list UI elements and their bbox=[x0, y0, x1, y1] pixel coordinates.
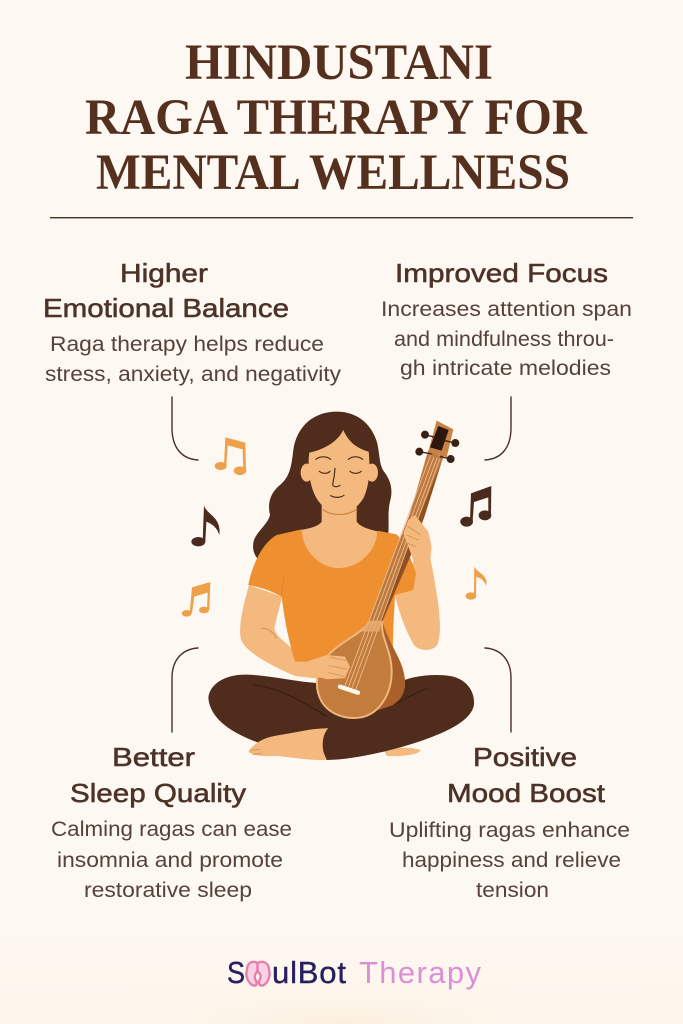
right arm bbox=[395, 550, 440, 650]
music notes bbox=[182, 437, 491, 617]
text: sleep quality description: insomnia and promote bbox=[57, 849, 283, 872]
icon: brain bbox=[246, 962, 270, 986]
logo: SoulBot Therapy: ulBot bbox=[272, 955, 346, 990]
right foot bbox=[383, 748, 421, 756]
heading: mood boost bbox=[447, 742, 606, 808]
note: dark double right bbox=[460, 486, 491, 527]
sitar bbox=[317, 421, 459, 718]
text: mood boost description: tension bbox=[476, 879, 549, 902]
heading: sleep quality bbox=[70, 742, 246, 808]
text: mood boost description bbox=[389, 819, 630, 902]
illustration: woman playing sitar bbox=[208, 412, 474, 760]
connector: bottom left bbox=[172, 648, 198, 732]
text: mood boost description: happiness and relieve bbox=[402, 849, 621, 872]
strings bbox=[345, 455, 440, 690]
title bbox=[85, 35, 588, 201]
neck and chest bbox=[301, 500, 377, 568]
heading: sleep quality: Sleep Quality bbox=[70, 778, 246, 808]
sitar body bbox=[317, 622, 392, 718]
sitar neck bbox=[375, 430, 452, 622]
face bbox=[309, 430, 369, 513]
connector: bottom right bbox=[485, 648, 511, 732]
note: dark single left bbox=[191, 505, 220, 546]
text: sleep quality description bbox=[51, 818, 292, 902]
heading: emotional balance: Higher bbox=[120, 258, 208, 288]
note: orange beamed lower left bbox=[182, 582, 210, 617]
left foot bbox=[248, 728, 328, 760]
text: improved focus description: Increases attention span bbox=[381, 298, 632, 321]
neck joint bbox=[362, 621, 382, 632]
panel: improved focus bbox=[381, 258, 632, 380]
panel: mood boost bbox=[389, 742, 630, 902]
logo: SoulBot Therapy: Therapy bbox=[359, 955, 482, 990]
text: improved focus description: and mindfulness throu- bbox=[394, 328, 614, 351]
text: improved focus description: gh intricate melodies bbox=[400, 357, 611, 380]
right hand bbox=[403, 515, 432, 563]
heading: sleep quality: Better bbox=[112, 742, 195, 772]
text: emotional balance description: stress, anxiety, and negativity bbox=[45, 363, 342, 386]
connector: top left bbox=[172, 397, 198, 460]
legs bbox=[208, 675, 474, 760]
peg box bbox=[428, 421, 453, 457]
heading: mood boost: Mood Boost bbox=[447, 778, 606, 808]
sitar back bbox=[347, 620, 405, 718]
left hand bbox=[307, 655, 350, 679]
panel: emotional balance bbox=[43, 258, 342, 386]
text: sleep quality description: Calming ragas can ease bbox=[51, 818, 292, 841]
connector: top right bbox=[485, 397, 511, 460]
heading: emotional balance bbox=[43, 258, 289, 323]
ears bbox=[301, 464, 313, 482]
left arm bbox=[240, 585, 348, 680]
title: MENTAL WELLNESS bbox=[96, 145, 570, 201]
logo: SoulBot Therapy: S bbox=[227, 955, 245, 990]
heading: emotional balance: Emotional Balance bbox=[43, 293, 289, 323]
note: orange single right bbox=[466, 567, 487, 600]
logo: SoulBot Therapy bbox=[227, 955, 482, 990]
title: HINDUSTANI bbox=[185, 35, 493, 91]
text: mood boost description: Uplifting ragas enhance bbox=[389, 819, 630, 842]
text: sleep quality description: restorative sleep bbox=[84, 879, 252, 902]
tuning pegs bbox=[416, 431, 459, 462]
heading: improved focus: Improved Focus bbox=[395, 258, 608, 288]
note: orange double top left bbox=[215, 437, 246, 475]
facial features bbox=[316, 457, 363, 497]
panel: sleep quality bbox=[51, 742, 292, 902]
hair bbox=[253, 412, 391, 559]
text: improved focus description bbox=[381, 298, 632, 380]
text: emotional balance description: Raga therapy helps reduce bbox=[50, 333, 324, 356]
shirt bbox=[248, 529, 416, 663]
heading: mood boost: Positive bbox=[473, 742, 577, 772]
text: emotional balance description bbox=[45, 333, 342, 386]
bridge bbox=[340, 687, 358, 693]
title: RAGA THERAPY FOR bbox=[85, 90, 588, 146]
